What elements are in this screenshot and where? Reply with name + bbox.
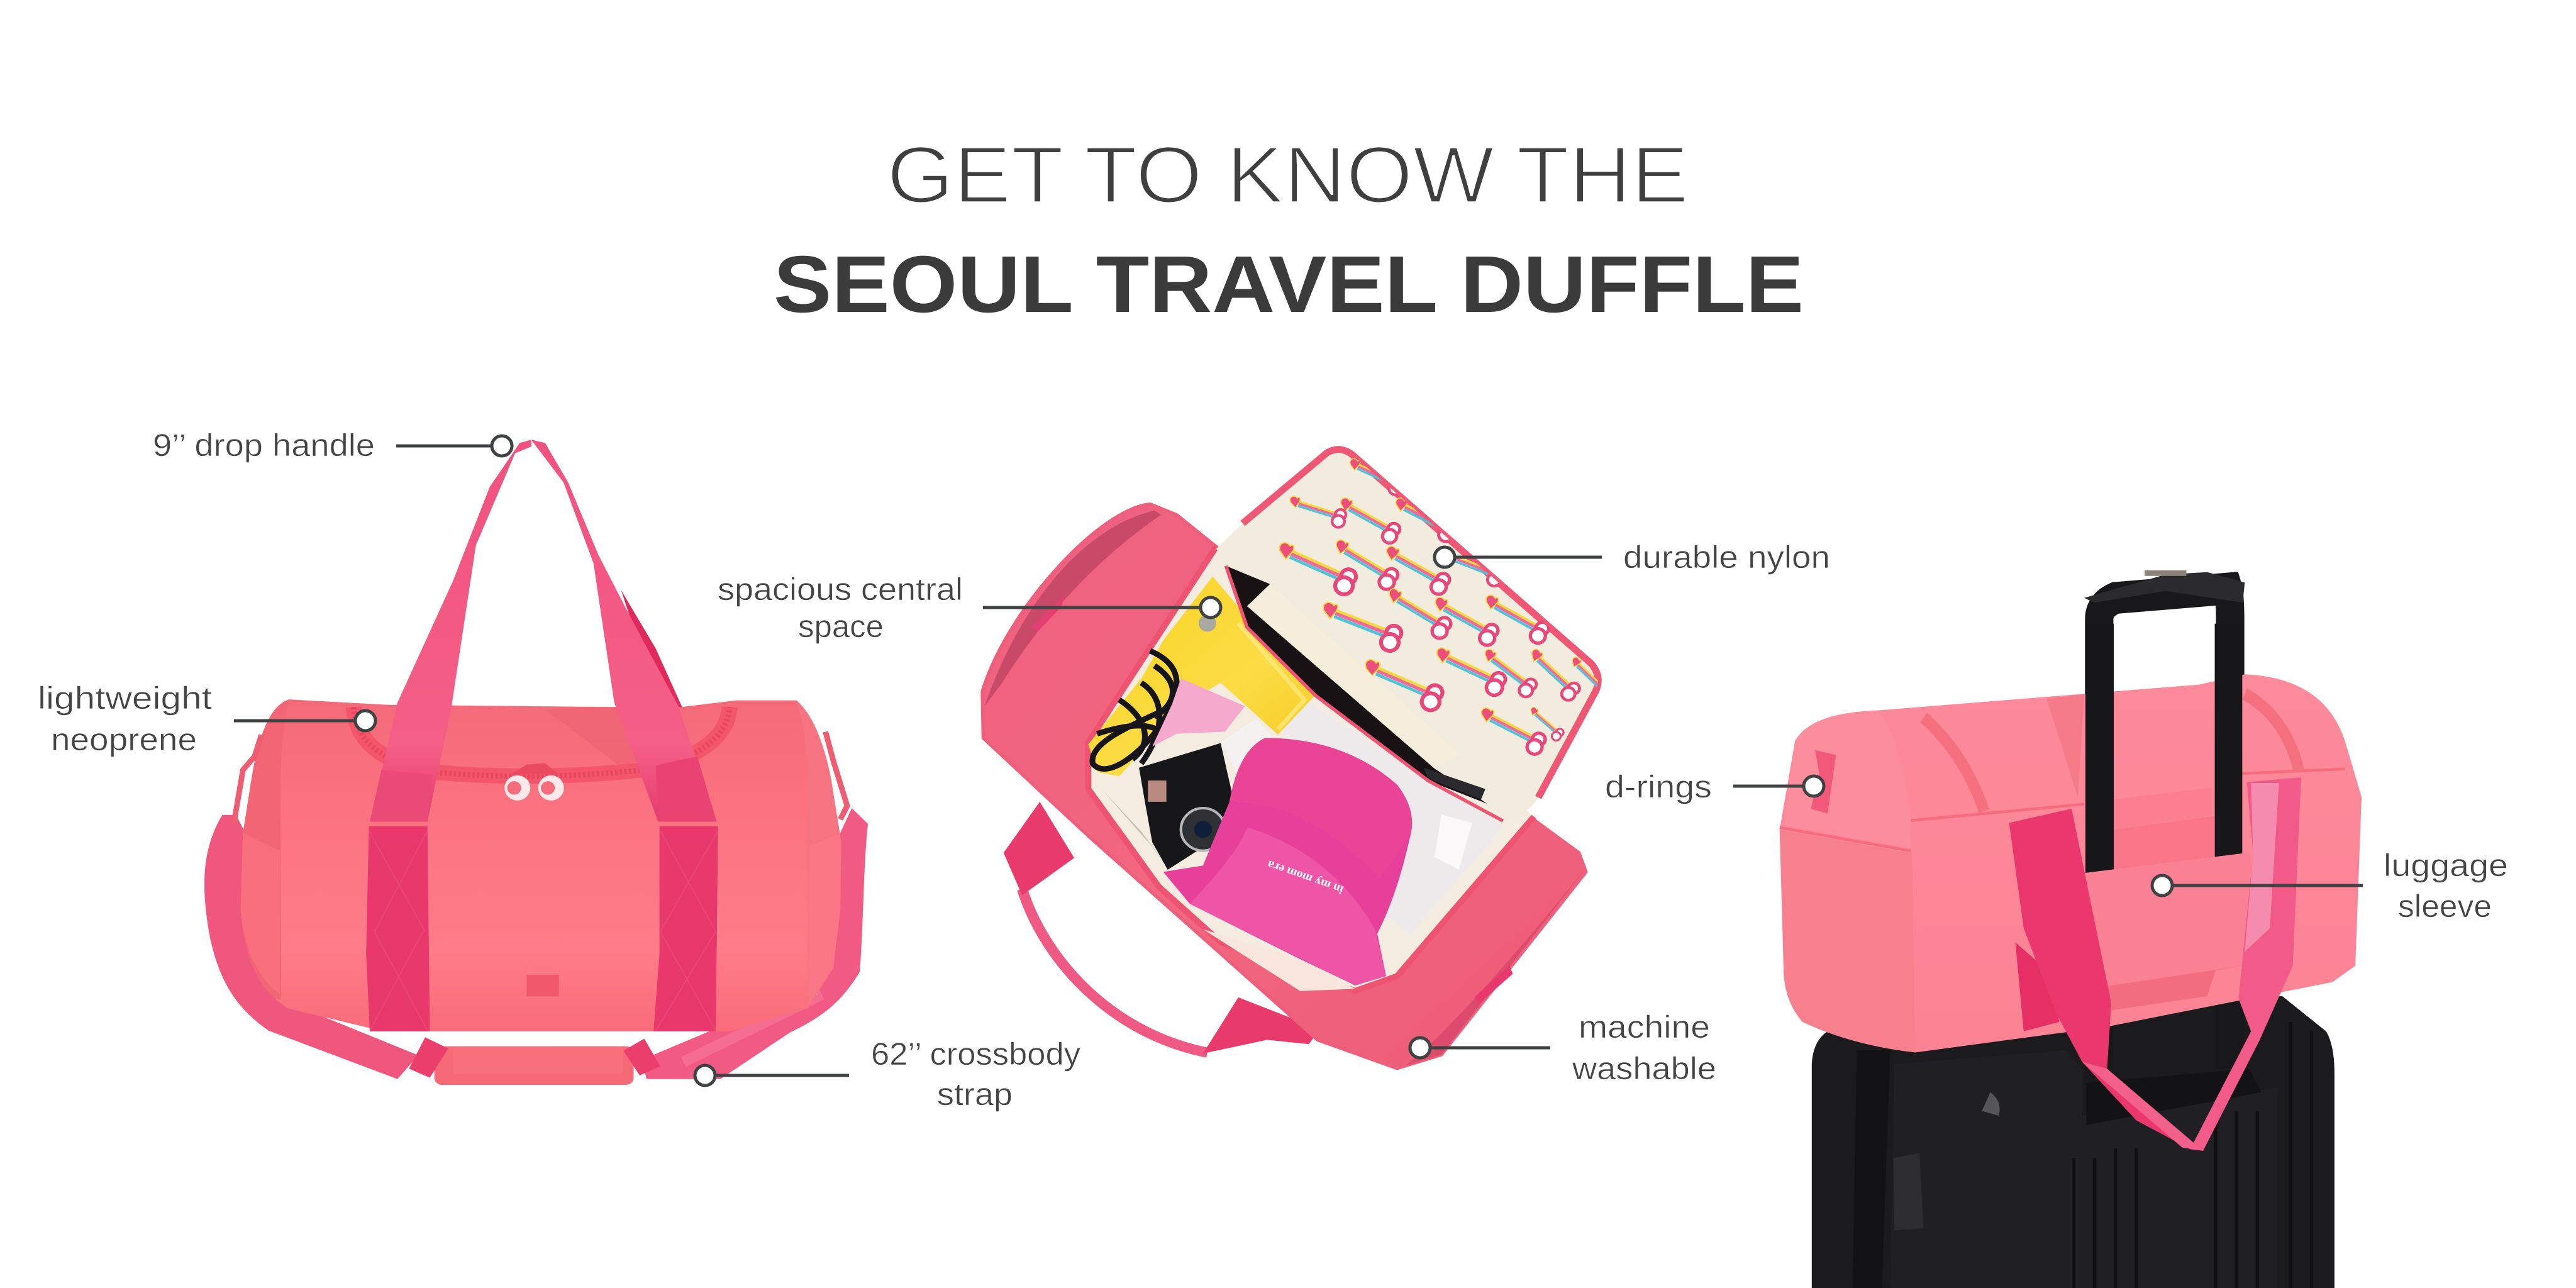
callout: luggage sleeve [2152, 848, 2508, 924]
shadow on top panel [545, 708, 642, 765]
luggage sleeve [2084, 852, 2251, 987]
callout: spacious central space: spacious central [718, 572, 963, 607]
callout: lightweight neoprene [38, 680, 375, 757]
handle legs over bag [2085, 624, 2242, 874]
crossbody strap [204, 808, 868, 1079]
bag body [1780, 674, 2362, 1052]
lower lining [1203, 930, 1355, 991]
front pocket [2114, 787, 2211, 830]
product image: duffle on luggage [1780, 570, 2362, 1288]
end panels [241, 699, 289, 999]
telescopic handle [2084, 570, 2245, 1078]
callout: spacious central space [718, 572, 1221, 644]
d-rings [234, 732, 847, 824]
callout: spacious central space: space [798, 609, 884, 644]
bag body [241, 699, 841, 1031]
suitcase [1812, 996, 2334, 1288]
callout: machine washable: machine [1579, 1009, 1710, 1045]
callout: durable nylon: durable nylon [1623, 540, 1830, 575]
book in lid pocket [1226, 566, 1503, 821]
hair dryer [1088, 577, 1314, 776]
callout: luggage sleeve: luggage [2384, 848, 2508, 883]
callout: 9 inch drop handle: 9’’ drop handle [153, 428, 375, 463]
bag shell [982, 504, 1586, 1069]
back strap [2190, 777, 2301, 1151]
callout: 62 inch crossbody strap: 62’’ crossbody [871, 1036, 1080, 1072]
star pouch [1152, 679, 1245, 747]
lower strap panels [366, 826, 718, 1031]
callout: durable nylon [1435, 540, 1830, 575]
zipper [353, 707, 730, 776]
callout: lightweight neoprene: lightweight [38, 680, 212, 716]
callout: 62 inch crossbody strap [695, 1036, 1080, 1112]
callout: machine washable [1410, 1009, 1716, 1086]
title: SEOUL TRAVEL DUFFLE [774, 240, 1804, 330]
near end panel shading [985, 511, 1161, 706]
camera [1139, 743, 1233, 870]
title: GET TO KNOW THE [887, 130, 1689, 220]
d-ring tab [1811, 750, 1836, 813]
callout: d-rings [1605, 769, 1824, 804]
interior [1088, 547, 1534, 991]
upper handles [370, 440, 717, 821]
lid lining [1216, 450, 1613, 821]
callout: machine washable: washable [1572, 1051, 1716, 1086]
product image: front view of duffle [204, 440, 868, 1085]
buckles [409, 1037, 660, 1078]
callout: 9 inch drop handle [153, 428, 512, 463]
logo patch [526, 975, 559, 996]
callout: lightweight neoprene: neoprene [51, 722, 197, 757]
callout: d-rings: d-rings [1605, 769, 1712, 804]
white clothes [1282, 700, 1503, 933]
back handle edge [621, 591, 682, 711]
carry handle [1004, 802, 1320, 1053]
pink cap: in my mom era [1265, 858, 1345, 896]
title [774, 130, 1804, 330]
pink cap [1163, 738, 1412, 985]
callout: 62 inch crossbody strap: strap [937, 1077, 1013, 1112]
sneaker [1221, 719, 1274, 776]
front strap [2016, 942, 2059, 1031]
callout: luggage sleeve: sleeve [2398, 889, 2492, 924]
product image: open duffle from above [982, 450, 1613, 1069]
zipper pulls [504, 763, 564, 801]
strap pad [435, 1046, 634, 1085]
